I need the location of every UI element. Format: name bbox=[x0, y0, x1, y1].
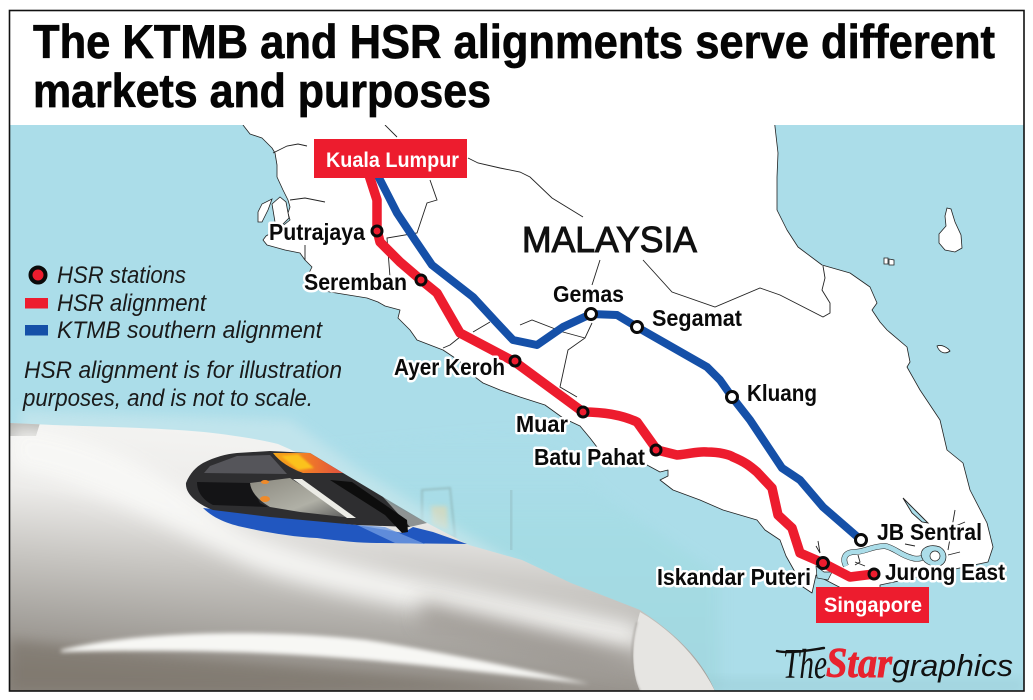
legend labels: HSR alignment bbox=[57, 290, 207, 317]
logo: The Star graphics bbox=[777, 641, 1013, 688]
station labels: Iskandar Puteri bbox=[657, 564, 811, 590]
wiper bbox=[330, 480, 408, 533]
note: purposes, and is not to scale. bbox=[22, 385, 313, 412]
train body bbox=[10, 423, 715, 691]
station labels: Gemas bbox=[553, 281, 624, 307]
terminus: Kuala Lumpur bbox=[314, 139, 467, 178]
station labels: JB Sentral bbox=[877, 519, 982, 545]
legend labels bbox=[57, 262, 323, 344]
station labels: Seremban bbox=[304, 269, 407, 295]
state borders bbox=[273, 125, 830, 397]
icon: HSR stations bbox=[30, 268, 46, 282]
country label: Malaysia: MALAYSIA bbox=[522, 219, 697, 260]
legend labels: HSR stations bbox=[57, 262, 186, 289]
station labels: Putrajaya bbox=[269, 219, 365, 245]
station labels: Segamat bbox=[652, 305, 742, 331]
terminus: Kuala Lumpur: Kuala Lumpur bbox=[326, 148, 460, 172]
legend bbox=[25, 262, 323, 344]
land: peninsula bbox=[240, 118, 993, 593]
logo: The Star graphics: graphics bbox=[892, 648, 1013, 683]
note bbox=[22, 357, 342, 412]
KTMB alignment line bbox=[376, 172, 861, 540]
title: markets and purposes bbox=[33, 65, 491, 118]
sea bbox=[10, 125, 1024, 691]
johor strait and lagoons bbox=[816, 498, 946, 580]
HSR alignment line bbox=[368, 172, 874, 577]
cab lamp bbox=[273, 453, 343, 473]
islands bbox=[258, 197, 962, 353]
station labels: Kluang bbox=[747, 380, 817, 406]
station labels bbox=[269, 219, 1005, 590]
station labels: Jurong East bbox=[885, 559, 1005, 585]
title panel bbox=[9, 10, 1024, 125]
terminus: Singapore: Singapore bbox=[824, 593, 922, 617]
logo: The Star graphics: The bbox=[783, 642, 827, 688]
logo: The Star graphics: Star bbox=[826, 641, 893, 687]
KTMB station markers bbox=[586, 308, 866, 546]
train photo background bbox=[10, 410, 1024, 691]
legend labels: KTMB southern alignment bbox=[57, 317, 323, 344]
station labels: Batu Pahat bbox=[534, 444, 645, 470]
icon: HSR alignment swatch bbox=[25, 298, 48, 308]
HSR station markers bbox=[372, 226, 879, 579]
station labels: Ayer Keroh bbox=[394, 354, 505, 380]
train bbox=[10, 423, 715, 691]
train window bbox=[186, 451, 467, 544]
note: HSR alignment is for illustration bbox=[24, 357, 342, 384]
title bbox=[33, 16, 995, 118]
terminus: Singapore bbox=[816, 587, 929, 623]
station labels: Muar bbox=[516, 411, 568, 437]
icon: KTMB alignment swatch bbox=[25, 325, 48, 336]
